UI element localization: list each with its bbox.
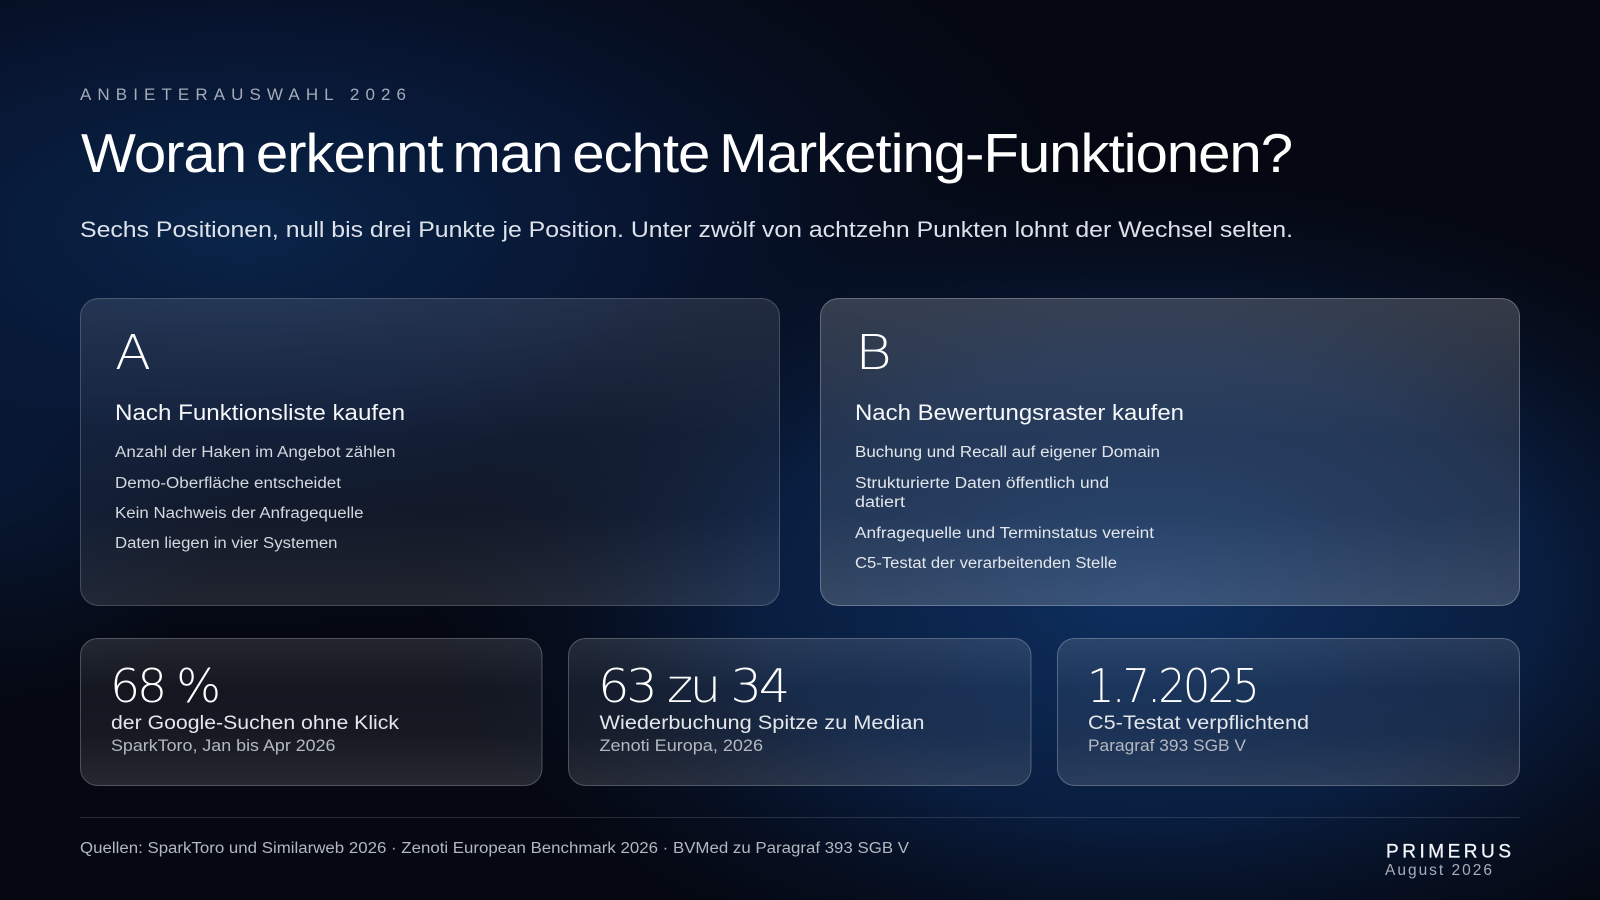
sources footer: Quellen: SparkToro und Similarweb 2026 · Zenoti European Benchmark 2026 · BVMed zu Paragraf 393 SGB V [80,840,910,857]
value: 1.7.2025 [1087,659,1257,713]
list B: C5-Testat der verarbeitenden Stelle [855,555,1117,572]
label: Wiederbuchung Spitze zu Median [600,713,924,734]
subtitle: Sechs Positionen, null bis drei Punkte je Position. Unter zwölf von achtzehn Punkten lohnt der Wechsel selten. [80,217,1293,242]
stat card: 63 zu 34 [568,638,1031,786]
value: 63 zu 34 [598,659,787,713]
stat card: 1.7.2025 [1058,638,1520,786]
title: Woran erkennt man echte Marketing-Funktionen? [81,122,1292,184]
label: C5-Testat verpflichtend [1088,713,1309,734]
heading A: Nach Funktionsliste kaufen [115,400,405,425]
list B: Anfragequelle und Terminstatus vereint [855,525,1155,542]
heading B: Nach Bewertungsraster kaufen [855,400,1184,425]
list B [855,444,1160,572]
list B: datiert [855,494,906,511]
list A [115,444,396,552]
label: der Google-Suchen ohne Klick [111,713,400,734]
brand: PRIMERUS [1386,842,1511,862]
list A: Daten liegen in vier Systemen [115,535,338,552]
letter A: A [115,325,151,381]
panel: option B [820,298,1520,606]
eyebrow: ANBIETERAUSWAHL 2026 [80,85,406,104]
value: 68 % [110,659,218,713]
source: Paragraf 393 SGB V [1088,737,1246,755]
brand [1385,842,1511,879]
list A: Demo-Oberfläche entscheidet [115,475,342,492]
list B: Strukturierte Daten öffentlich und [855,475,1109,492]
source: Zenoti Europa, 2026 [600,737,763,755]
source: SparkToro, Jan bis Apr 2026 [111,737,336,755]
letter B: B [855,325,892,381]
stat card: 68 % [80,638,542,786]
list B: Buchung und Recall auf eigener Domain [855,444,1160,461]
list A: Anzahl der Haken im Angebot zählen [115,444,396,461]
brand: August 2026 [1385,862,1492,879]
panel: option A [80,298,780,606]
list A: Kein Nachweis der Anfragequelle [115,505,364,522]
